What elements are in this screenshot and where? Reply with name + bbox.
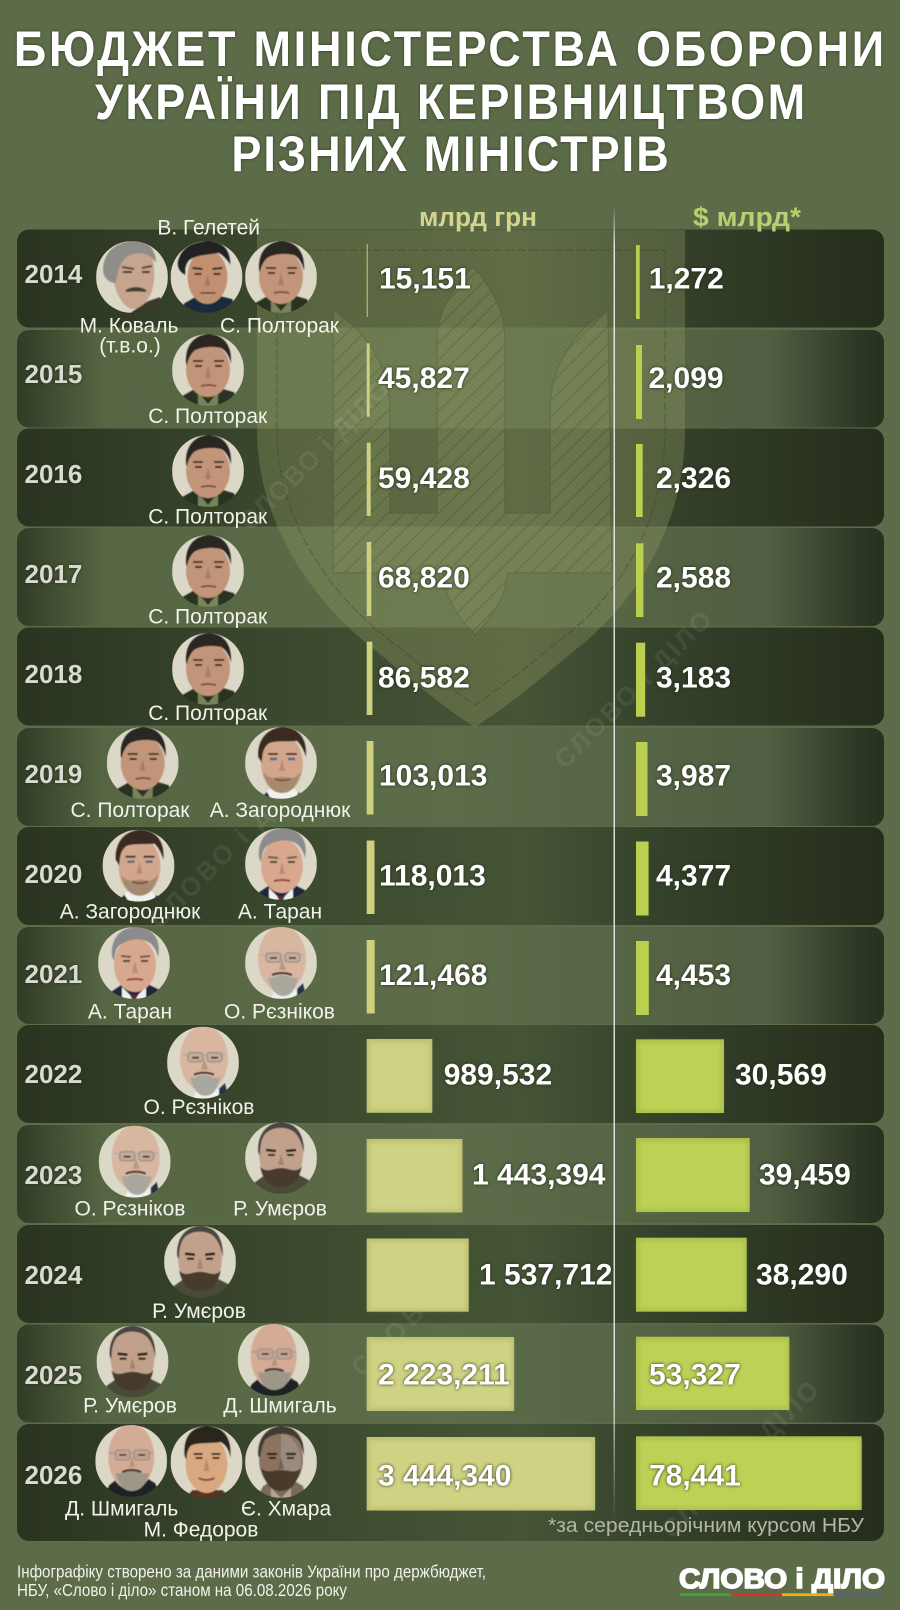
photo: Umerov	[96, 1326, 168, 1398]
value: dollar: 39,459	[759, 1158, 851, 1192]
value: dollar: 2,588	[656, 562, 731, 594]
watermark: logo text: СЛОВО і ДІЛО	[548, 605, 718, 774]
photo: Poltorak	[172, 334, 244, 406]
bar: hryvnia	[367, 1437, 595, 1510]
year: 2017	[24, 559, 82, 589]
watermark: logo text: СЛОВ	[345, 1297, 430, 1382]
source note: Інфографіку створено за даними законів України про держбюджет,	[17, 1562, 486, 1582]
photo: Zahorodniuk	[245, 727, 317, 799]
title: РІЗНИХ МІНІСТРІВ	[231, 127, 669, 183]
names: О. Рєзніков	[224, 1000, 335, 1024]
names: А. Загороднюк	[60, 900, 201, 924]
value: hryvnia: 1 537,712	[479, 1258, 612, 1292]
photo: Fedorov	[170, 1426, 242, 1498]
row 2025	[24, 1323, 789, 1418]
value: hryvnia: 59,428	[378, 462, 470, 495]
photo: Poltorak	[172, 535, 244, 607]
column heading: billions of hryvnias: млрд грн	[419, 202, 537, 232]
bar: dollar	[636, 941, 649, 1015]
value: dollar: 53,327	[649, 1358, 741, 1392]
row 2023	[24, 1122, 851, 1220]
value: hryvnia: 103,013	[379, 760, 487, 792]
value: hryvnia: 15,151	[379, 262, 471, 296]
watermark: logo text: СЛОВО і ДІЛО	[233, 374, 396, 536]
value: dollar: 3,987	[656, 760, 731, 792]
name: С. Полторак	[148, 405, 268, 428]
photo: Khmara	[245, 1426, 317, 1498]
name: С. Полторак	[148, 702, 268, 725]
bar: dollar	[636, 1436, 862, 1510]
row 2021	[24, 926, 731, 1024]
names	[80, 216, 340, 358]
names: С. Полторак	[220, 314, 340, 338]
row 2014	[24, 216, 724, 358]
bar: dollar	[636, 1337, 789, 1410]
year: 2024	[24, 1260, 83, 1290]
value: dollar: 78,441	[649, 1460, 741, 1492]
photo: Reznikov	[245, 926, 317, 999]
names	[88, 1000, 335, 1024]
footnote: *за середньорічним курсом НБУ	[548, 1515, 864, 1537]
bar: hryvnia	[367, 840, 374, 914]
row 2016	[24, 435, 731, 528]
value: dollar: 4,453	[656, 959, 731, 992]
value: hryvnia: 989,532	[444, 1058, 552, 1092]
bar: dollar	[636, 1039, 724, 1113]
names: М. Федоров	[144, 1518, 258, 1542]
divider line between columns	[614, 205, 615, 1520]
value: hryvnia: 68,820	[378, 562, 470, 594]
names: Д. Шмигаль	[223, 1394, 337, 1418]
photo: Reznikov	[167, 1026, 239, 1099]
year: 2020	[24, 859, 82, 889]
value: hryvnia: 118,013	[379, 860, 486, 892]
value: dollar: 2,326	[656, 462, 731, 495]
names: С. Полторак	[70, 799, 190, 822]
photo: Shmyhal	[95, 1424, 167, 1497]
photo: Heletey	[170, 241, 242, 313]
value: hryvnia: 1 443,394	[472, 1158, 606, 1192]
photo: Zahorodniuk	[102, 830, 174, 902]
bar: hryvnia	[367, 244, 368, 317]
year: 2014	[24, 259, 83, 289]
row 2019	[24, 727, 731, 822]
names	[70, 799, 351, 822]
value: dollar: 38,290	[756, 1258, 848, 1292]
names: А. Загороднюк	[210, 799, 351, 822]
photo: Umerov	[164, 1226, 236, 1298]
names	[75, 1198, 327, 1220]
row 2022	[24, 1026, 827, 1119]
names: А. Таран	[238, 900, 322, 924]
bar: dollar	[636, 1138, 750, 1212]
title	[14, 22, 884, 183]
value: hryvnia: 86,582	[378, 662, 470, 694]
year: 2019	[24, 759, 82, 789]
value: hryvnia: 121,468	[379, 959, 487, 992]
title: БЮДЖЕТ МІНІСТЕРСТВА ОБОРОНИ	[14, 22, 884, 78]
name: С. Полторак	[148, 606, 268, 628]
photo: Shmyhal	[238, 1323, 310, 1396]
title: УКРАЇНИ ПІД КЕРІВНИЦТВОМ	[95, 75, 805, 131]
bar: hryvnia	[367, 642, 372, 715]
year: 2018	[24, 659, 82, 689]
name: О. Рєзніков	[144, 1096, 254, 1119]
photo: Koval	[96, 241, 168, 313]
names: О. Рєзніков	[75, 1198, 185, 1220]
watermark: logo text: СЛОВО і Д	[143, 800, 278, 934]
names: А. Таран	[88, 1000, 172, 1024]
photo: Poltorak	[107, 727, 179, 799]
photo: Taran	[98, 927, 170, 999]
year: 2025	[24, 1360, 82, 1390]
source note	[17, 1562, 486, 1600]
value: hryvnia: 3 444,340	[378, 1460, 511, 1492]
value: dollar: 1,272	[649, 262, 724, 296]
row 2026	[24, 1424, 862, 1542]
name: С. Полторак	[148, 506, 268, 528]
bar: hryvnia	[367, 343, 370, 417]
value: dollar: 2,099	[648, 362, 724, 395]
value: hryvnia: 45,827	[378, 362, 470, 395]
bar: hryvnia	[367, 443, 371, 516]
value: dollar: 3,183	[656, 662, 731, 694]
names	[65, 1498, 331, 1542]
bar: dollar	[636, 643, 645, 717]
year: 2026	[24, 1460, 82, 1490]
bar: dollar	[636, 842, 649, 916]
value: dollar: 30,569	[735, 1058, 827, 1092]
row 2024	[24, 1226, 848, 1323]
source note: НБУ, «Слово і діло» станом на 06.08.2026 року	[17, 1580, 347, 1600]
shield emblem watermark	[257, 230, 685, 727]
year: 2023	[24, 1160, 82, 1190]
bar: dollar	[636, 345, 642, 419]
row 2017	[24, 535, 731, 628]
photo: Reznikov	[99, 1125, 171, 1198]
names: Д. Шмигаль	[65, 1498, 178, 1520]
bar: hryvnia	[367, 1337, 514, 1411]
names	[83, 1394, 337, 1418]
photo: Poltorak	[172, 435, 244, 507]
value: hryvnia: 2 223,211	[378, 1358, 510, 1392]
photo: Poltorak	[172, 633, 244, 705]
names: Р. Умєров	[233, 1198, 327, 1220]
column heading: billions of dollars: $ млрд*	[693, 202, 802, 232]
year: 2016	[24, 459, 82, 489]
bar: hryvnia	[367, 1139, 462, 1212]
logo: СЛОВО і ДІЛО	[679, 1563, 885, 1594]
bar: hryvnia	[367, 1238, 469, 1312]
bar: dollar	[636, 543, 643, 617]
names: (т.в.о.)	[99, 334, 161, 358]
bar: dollar	[636, 444, 643, 517]
photo: Taran	[245, 828, 317, 900]
row 2018	[24, 633, 731, 725]
row 2015	[24, 334, 724, 428]
bar: dollar	[636, 1238, 747, 1312]
panel: year rows	[17, 230, 884, 1541]
watermark: logo text: СЛОВО і ДІЛО	[655, 1375, 825, 1544]
names: В. Гелетей	[157, 216, 260, 240]
names	[60, 900, 322, 924]
bar: hryvnia	[367, 542, 371, 616]
photo: Umerov	[245, 1122, 317, 1194]
names: Р. Умєров	[83, 1394, 177, 1418]
year: 2021	[24, 959, 82, 989]
bar: hryvnia	[367, 741, 374, 814]
photo: Poltorak	[245, 241, 317, 313]
bar: dollar	[636, 245, 640, 319]
row 2020	[24, 828, 731, 924]
year: 2015	[24, 359, 82, 389]
bar: dollar	[636, 742, 648, 816]
value: dollar: 4,377	[656, 860, 731, 892]
bar: hryvnia	[367, 1039, 432, 1113]
bar: hryvnia	[367, 940, 375, 1014]
names: Є. Хмара	[241, 1498, 331, 1520]
names: М. Коваль	[80, 314, 178, 338]
name: Р. Умєров	[152, 1300, 246, 1323]
watermark: logo text	[143, 374, 825, 1544]
year: 2022	[24, 1059, 82, 1089]
